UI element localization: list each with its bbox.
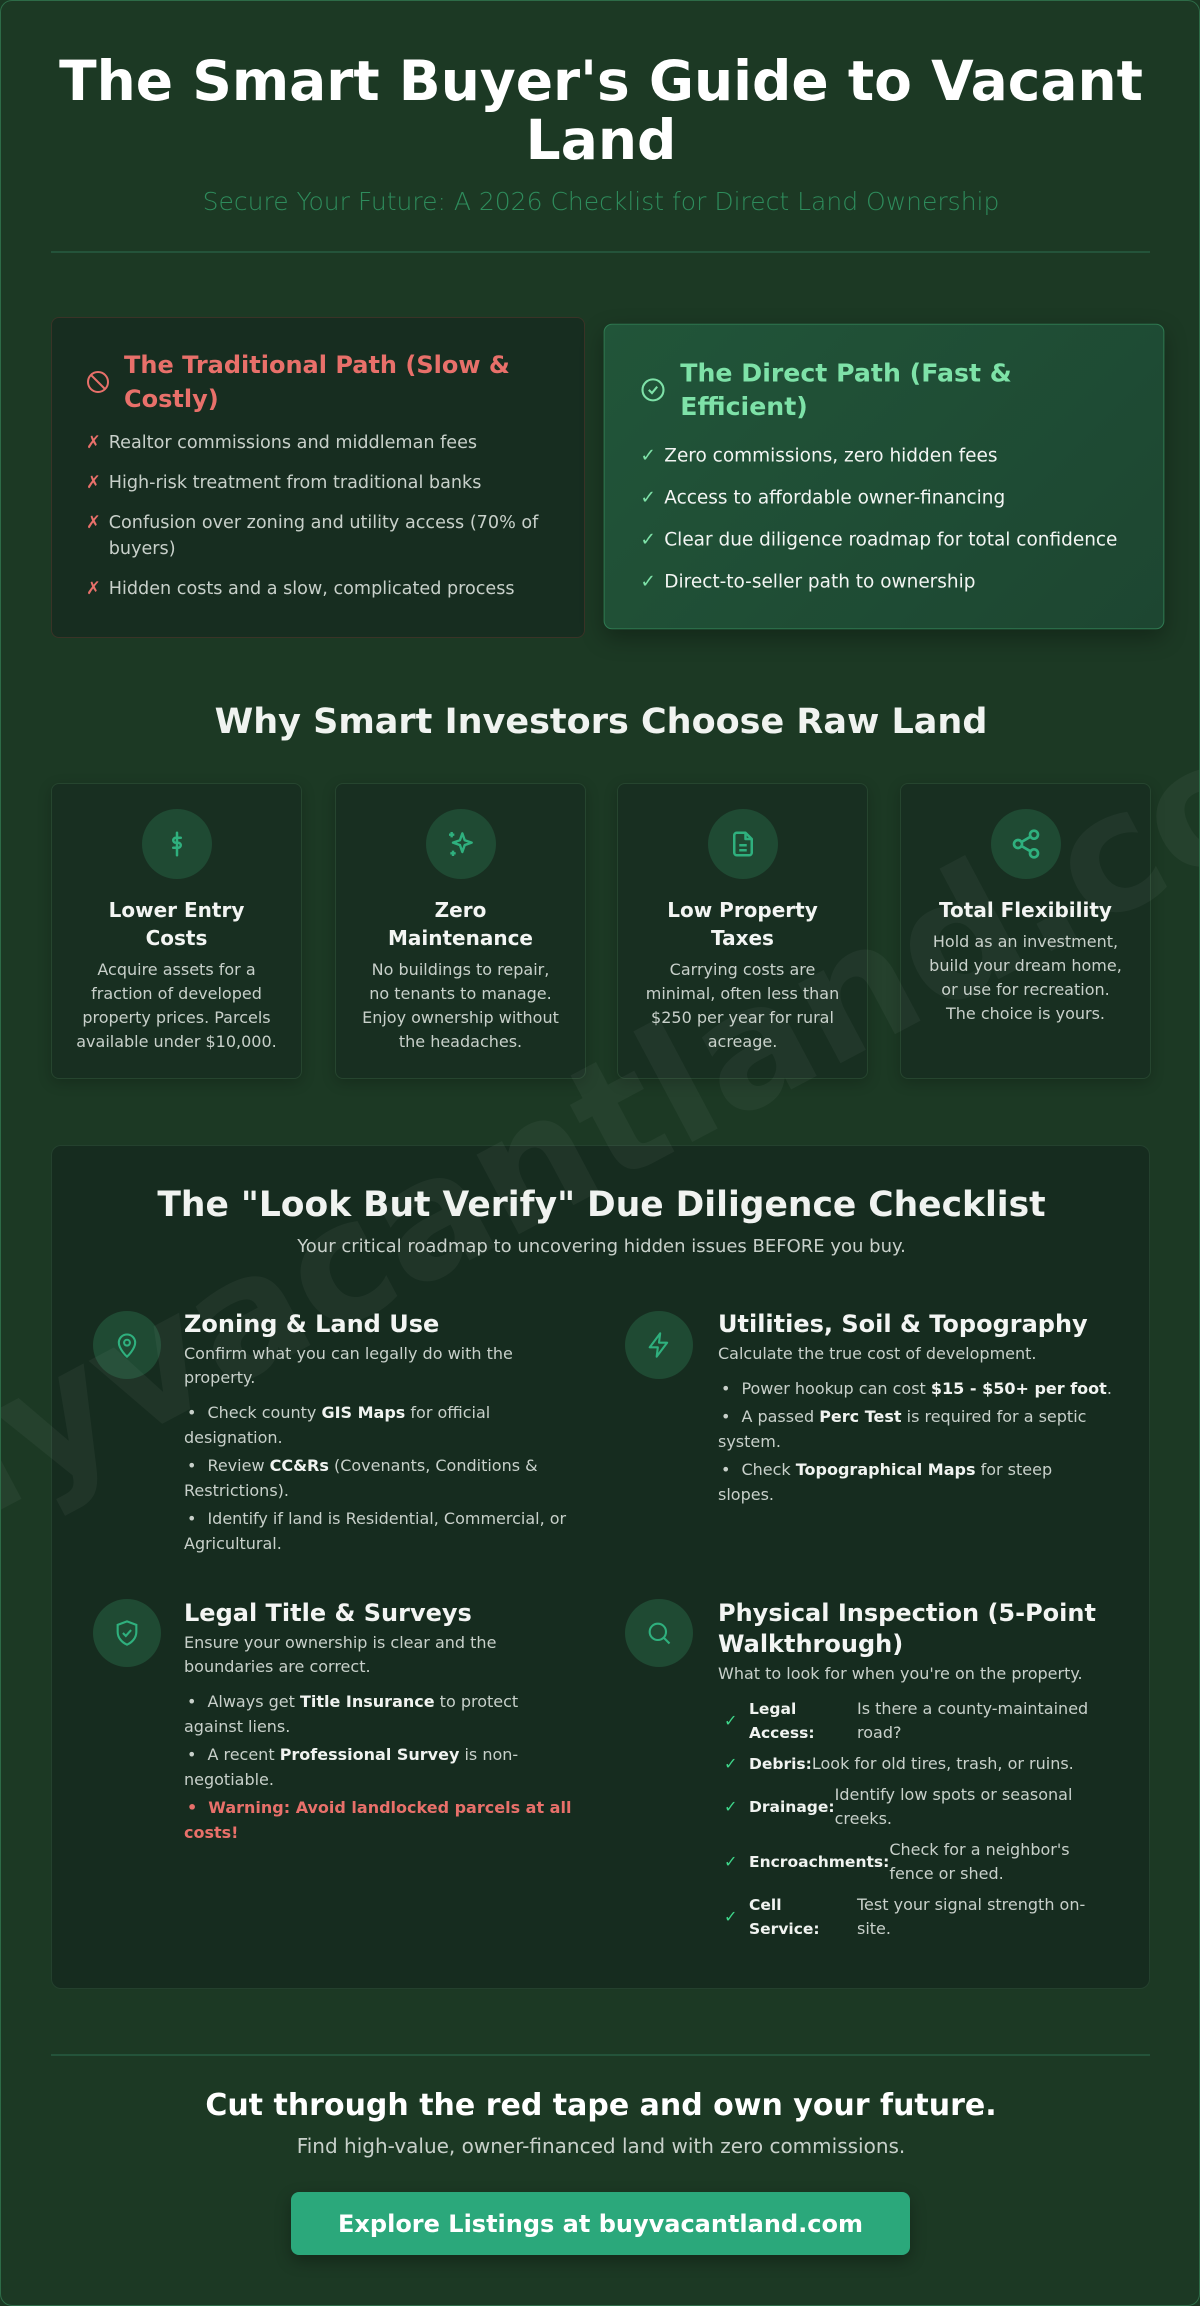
list: direct benefits: Access to affordable owner-financing [664,488,1005,509]
button: explore listings: Explore Listings at buyvacantland.com [338,2210,863,2238]
icon: map pin [93,1311,161,1379]
cta subtext: Find high-value, owner-financed land with zero commissions. [297,2134,905,2158]
checklist: walkthrough: ✓ [724,1907,737,1926]
list: direct benefits [640,446,1117,593]
item: legal title: Legal Title & Surveys [184,1599,472,1627]
item: legal title: Ensure your ownership is clear and the boundaries are correct. [184,1633,496,1676]
icon: lightning [625,1311,693,1379]
item: physical inspection [718,1599,1096,1938]
item: utilities: Check Topographical Maps for steep [741,1460,1052,1479]
list: traditional drawbacks [86,433,539,599]
list: traditional drawbacks: High-risk treatment from traditional banks [109,473,481,493]
item: utilities: A passed Perc Test is required for a septic system. [718,1407,1086,1451]
panel: traditional path [51,317,585,638]
icon: sparkles [426,809,496,879]
card: lower entry costs: Acquire assets for a fraction of developed property prices. Parcels available under $10,000. [76,960,277,1051]
subtitle: Secure Your Future: A 2026 Checklist for Direct Land Ownership [203,187,999,216]
checklist: walkthrough: Check for a neighbor's fence or shed. [889,1840,1070,1883]
heading: traditional path: The Traditional Path (Slow & Costly) [124,351,510,413]
list: direct benefits: ✓ [640,572,656,593]
item: legal title: Warning: Avoid landlocked parcels at all costs! [184,1798,571,1842]
list: direct benefits: Clear due diligence roadmap for total confidence [664,530,1117,551]
item: utilities: slopes. [718,1485,774,1504]
checklist: walkthrough: Drainage: [749,1798,835,1816]
list: traditional drawbacks: ✗ [86,579,101,599]
heading: why raw land: Why Smart Investors Choose Raw Land [215,702,987,742]
title: The Smart Buyer's Guide to Vacant Land [59,49,1143,172]
item: legal title [184,1599,571,1842]
list: traditional drawbacks: Confusion over zoning and utility access (70% of buyers) [109,513,538,559]
list: traditional drawbacks: Realtor commissions and middleman fees [109,433,477,453]
list: direct benefits: Zero commissions, zero hidden fees [664,446,998,467]
checklist: walkthrough: Service: [749,1920,820,1938]
card: total flexibility: Hold as an investment, build your dream home, or use for recreation. The choice is yours. [929,932,1122,1023]
item: legal title: A recent Professional Survey is non-negotiable. [184,1745,518,1789]
checklist: walkthrough: ✓ [724,1754,737,1773]
card: low property taxes: Carrying costs are minimal, often less than $250 per year for rural acreage. [646,960,839,1051]
icon: document [708,809,778,879]
checklist: walkthrough: Look for old tires, trash, or ruins. [812,1754,1074,1773]
panel: due diligence checklist [51,1145,1150,1989]
item: zoning [184,1310,566,1553]
list: direct benefits: Direct-to-seller path to ownership [664,572,975,593]
list: traditional drawbacks: ✗ [86,433,101,453]
checklist: walkthrough: Cell [749,1896,782,1914]
list: traditional drawbacks: Hidden costs and a slow, complicated process [109,579,515,599]
checklist: walkthrough: Test your signal strength on-site. [857,1895,1085,1938]
item: zoning: Review CC&Rs (Covenants, Conditions & Restrictions). [184,1456,538,1500]
icon: search [625,1599,693,1667]
item: zoning: Check county GIS Maps for official designation. [184,1403,490,1447]
subheading: Your critical roadmap to uncovering hidden issues BEFORE you buy. [297,1236,906,1257]
card: low property taxes [617,783,868,1079]
item: legal title: Always get Title Insurance to protect against liens. [184,1692,518,1736]
list: direct benefits: ✓ [640,446,656,467]
checklist: walkthrough: Legal [749,1700,796,1718]
item: utilities: Power hookup can cost $15 - $50+ per foot. [741,1379,1112,1398]
card: zero maintenance [335,783,586,1079]
item: zoning: Zoning & Land Use [184,1310,439,1338]
checklist: walkthrough: ✓ [724,1711,737,1730]
item: zoning: Identify if land is Residential, Commercial, or Agricultural. [184,1509,566,1553]
card: total flexibility [900,783,1151,1079]
checklist: walkthrough: Is there a county-maintained road? [857,1699,1088,1742]
list: direct benefits: ✓ [640,488,656,509]
heading: direct path: The Direct Path (Fast & Efficient) [680,358,1012,421]
checklist: walkthrough: ✓ [724,1797,737,1816]
card: low property taxes: Low Property Taxes [667,898,818,950]
card: total flexibility: Total Flexibility [939,898,1112,922]
checklist: walkthrough [724,1699,1088,1938]
checklist: walkthrough: Debris: [749,1755,812,1773]
heading: checklist: The "Look But Verify" Due Diligence Checklist [157,1185,1046,1225]
list: traditional drawbacks: ✗ [86,473,101,493]
card: zero maintenance: Zero Maintenance [388,898,533,950]
item: physical inspection: What to look for when you're on the property. [718,1664,1083,1683]
checklist: walkthrough: Encroachments: [749,1853,889,1871]
item: utilities [718,1310,1112,1504]
icon: share [990,809,1060,879]
item: physical inspection: Physical Inspection (5-Point Walkthrough) [718,1599,1096,1658]
item: utilities: Calculate the true cost of development. [718,1344,1036,1363]
panel: direct path [604,324,1164,629]
checklist: walkthrough: Access: [749,1724,815,1742]
button: explore listings [291,2192,910,2255]
icon: dollar [142,809,212,879]
cta heading: Cut through the red tape and own your future. [205,2088,997,2123]
card: lower entry costs: Lower Entry Costs [109,898,244,950]
checklist: walkthrough: Identify low spots or seasonal creeks. [835,1785,1072,1828]
card: lower entry costs [51,783,302,1079]
icon: shield [93,1599,161,1667]
checklist: walkthrough: ✓ [724,1852,737,1871]
list: direct benefits: ✓ [640,530,656,551]
card: zero maintenance: No buildings to repair, no tenants to manage. Enjoy ownership without the headaches. [362,960,559,1051]
item: zoning: Confirm what you can legally do with the property. [184,1344,513,1387]
list: traditional drawbacks: ✗ [86,513,101,533]
item: utilities: Utilities, Soil & Topography [718,1310,1088,1338]
